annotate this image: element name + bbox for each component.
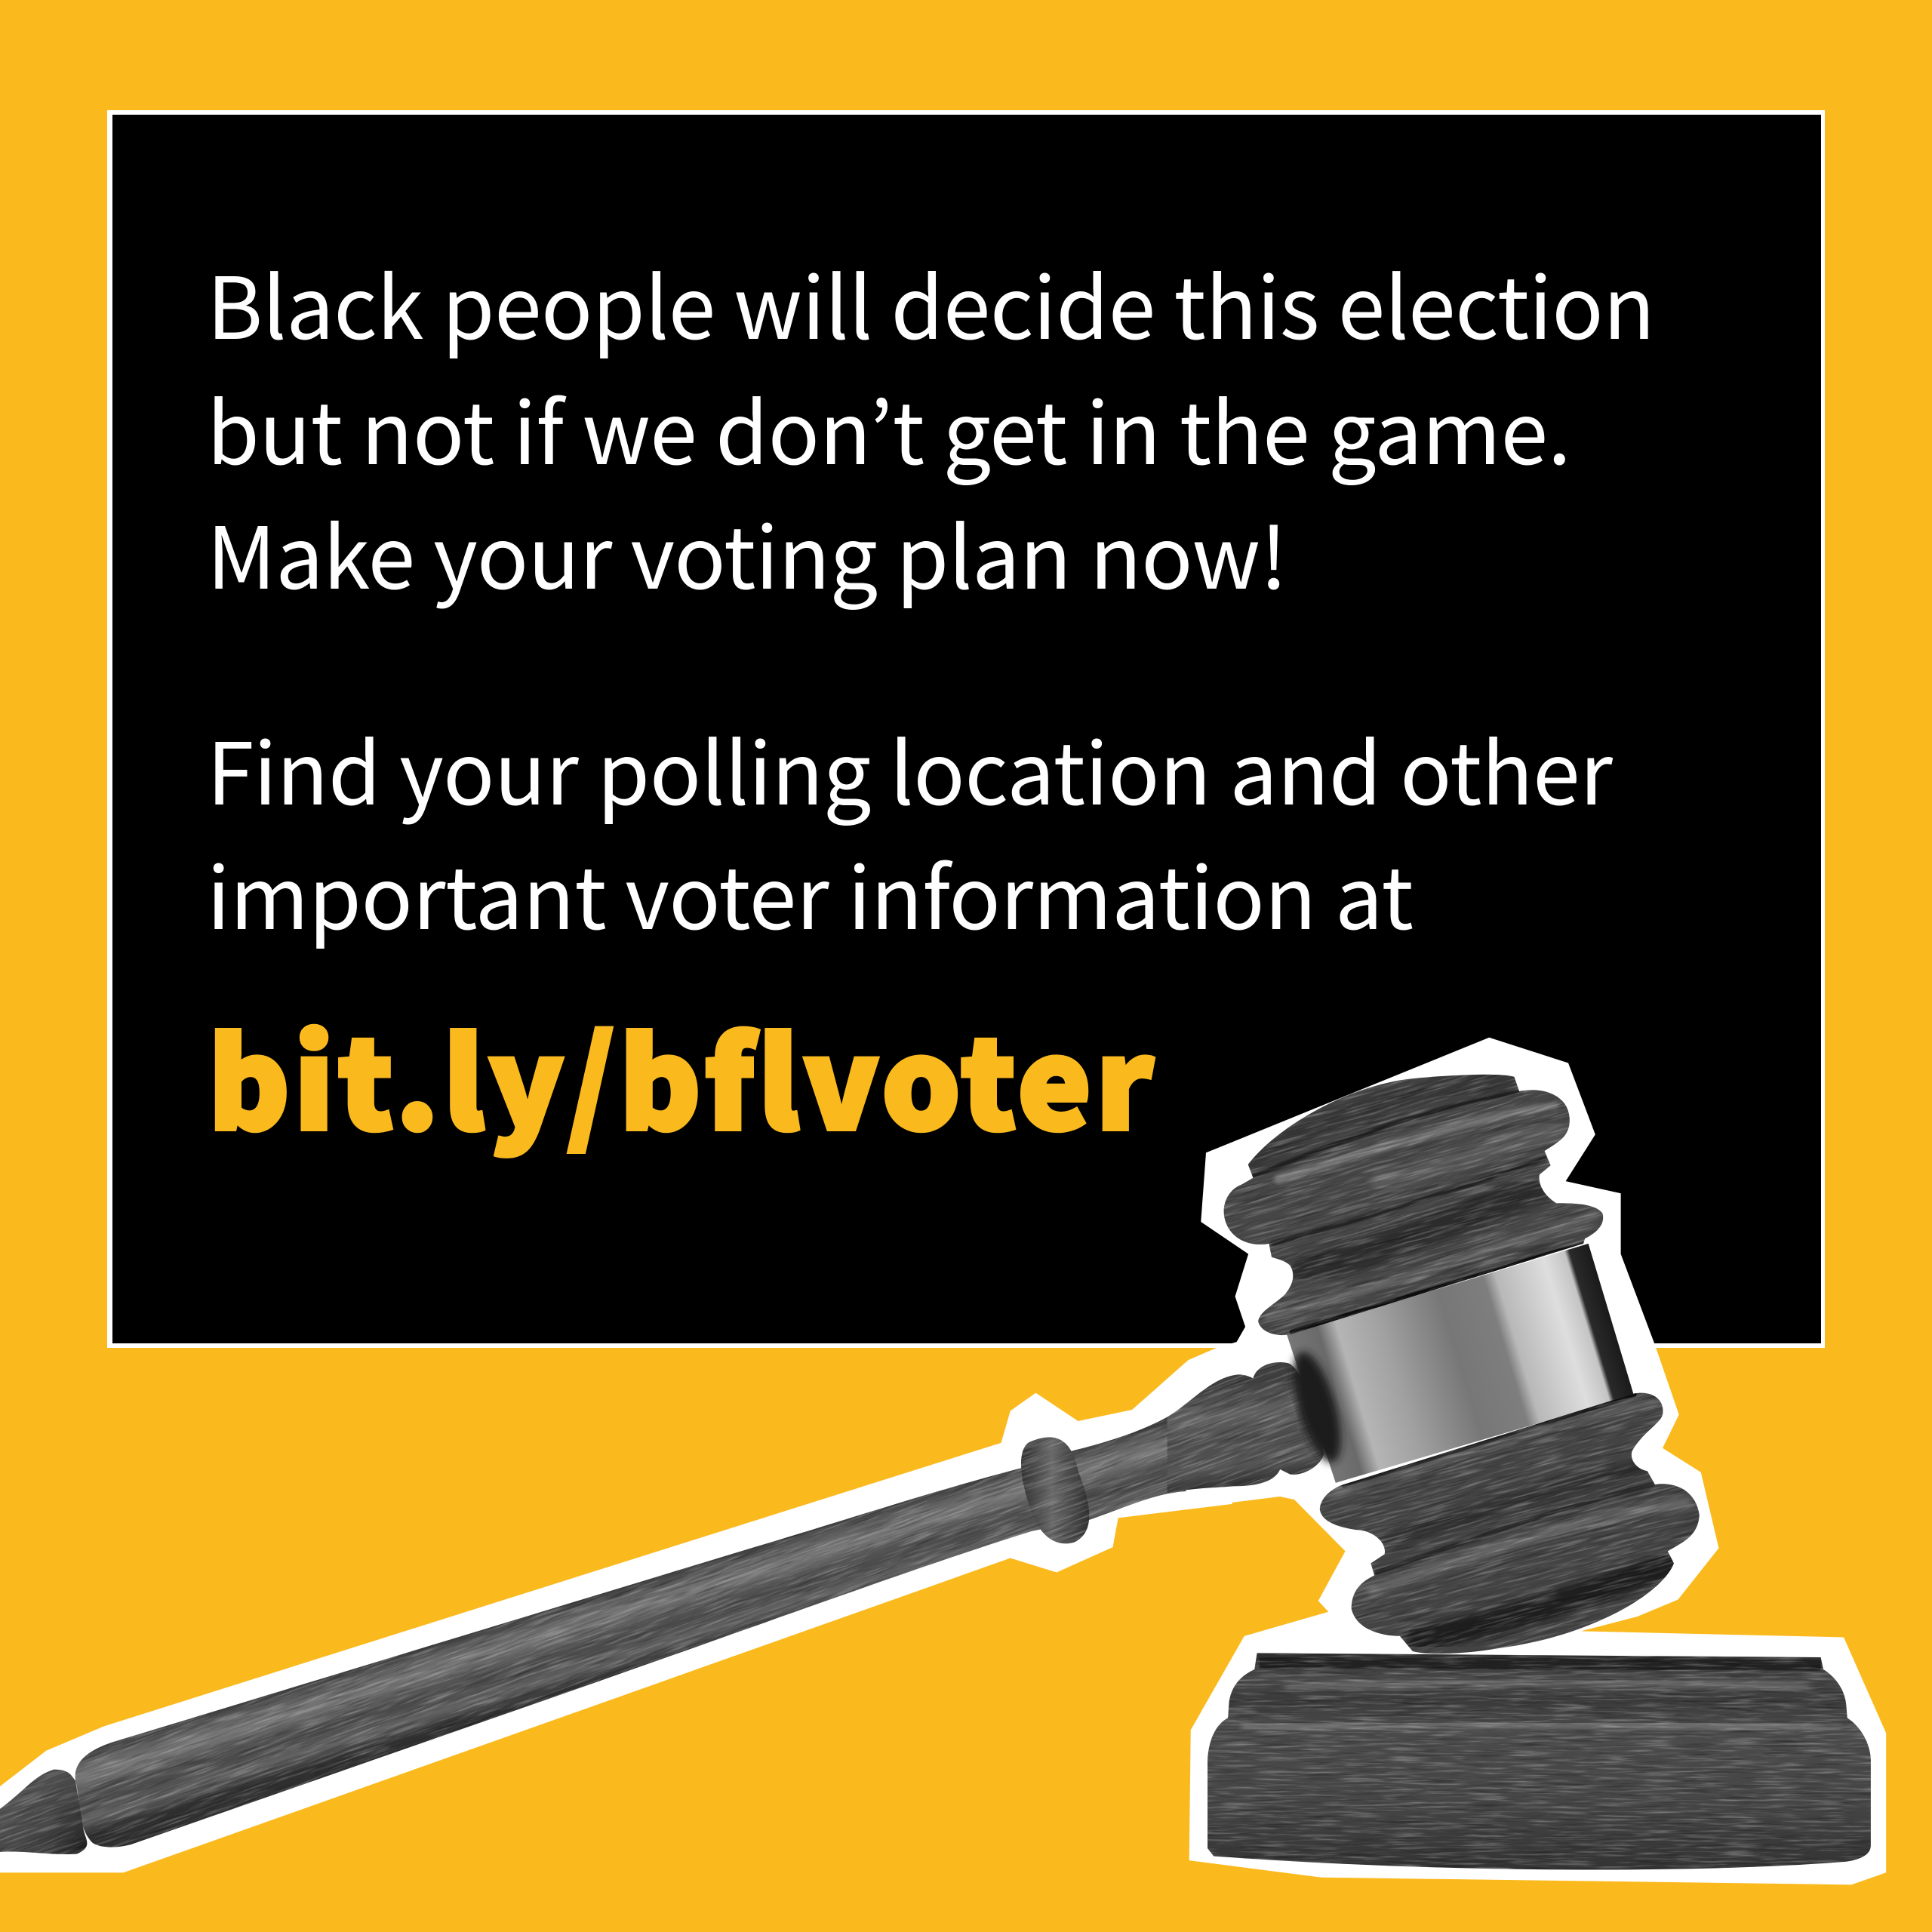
metal band — [1287, 1244, 1634, 1483]
upper head shading — [1224, 1075, 1603, 1335]
sound block — [1208, 1653, 1871, 1870]
lower head shading — [1320, 1393, 1700, 1654]
gavel head — [1224, 1075, 1700, 1654]
band neck shadow — [1284, 1347, 1351, 1467]
lower head wood — [1320, 1393, 1700, 1654]
handle end nub — [0, 1770, 87, 1854]
text block: election message: but not if we don’t get in the game. — [207, 365, 1571, 489]
handle neck — [1168, 1362, 1324, 1493]
handle collar ring — [1021, 1437, 1089, 1543]
upper head wood — [1224, 1075, 1603, 1335]
text block: election message: Make your voting plan now! — [207, 490, 1287, 614]
text block: polling information — [207, 706, 1614, 954]
text block: polling information: Find your polling location and other — [207, 706, 1614, 829]
icon: gavel and sound block — [0, 1037, 1887, 1885]
gavel head and sound block outline — [1132, 1038, 1886, 1884]
text block: election message: Black people will decide this election — [207, 240, 1655, 364]
gavel handle outline — [0, 1354, 1232, 1872]
link: bit.ly/bflvoter: bit.ly/bflvoter — [208, 986, 1154, 1165]
text block: election message — [207, 240, 1655, 614]
gavel handle — [0, 1303, 1352, 1932]
text block: polling information: important voter information at — [207, 830, 1414, 954]
handle wood grain — [0, 1362, 1321, 1854]
sound block shading — [1208, 1654, 1871, 1870]
panel: black message box — [107, 110, 1825, 1348]
